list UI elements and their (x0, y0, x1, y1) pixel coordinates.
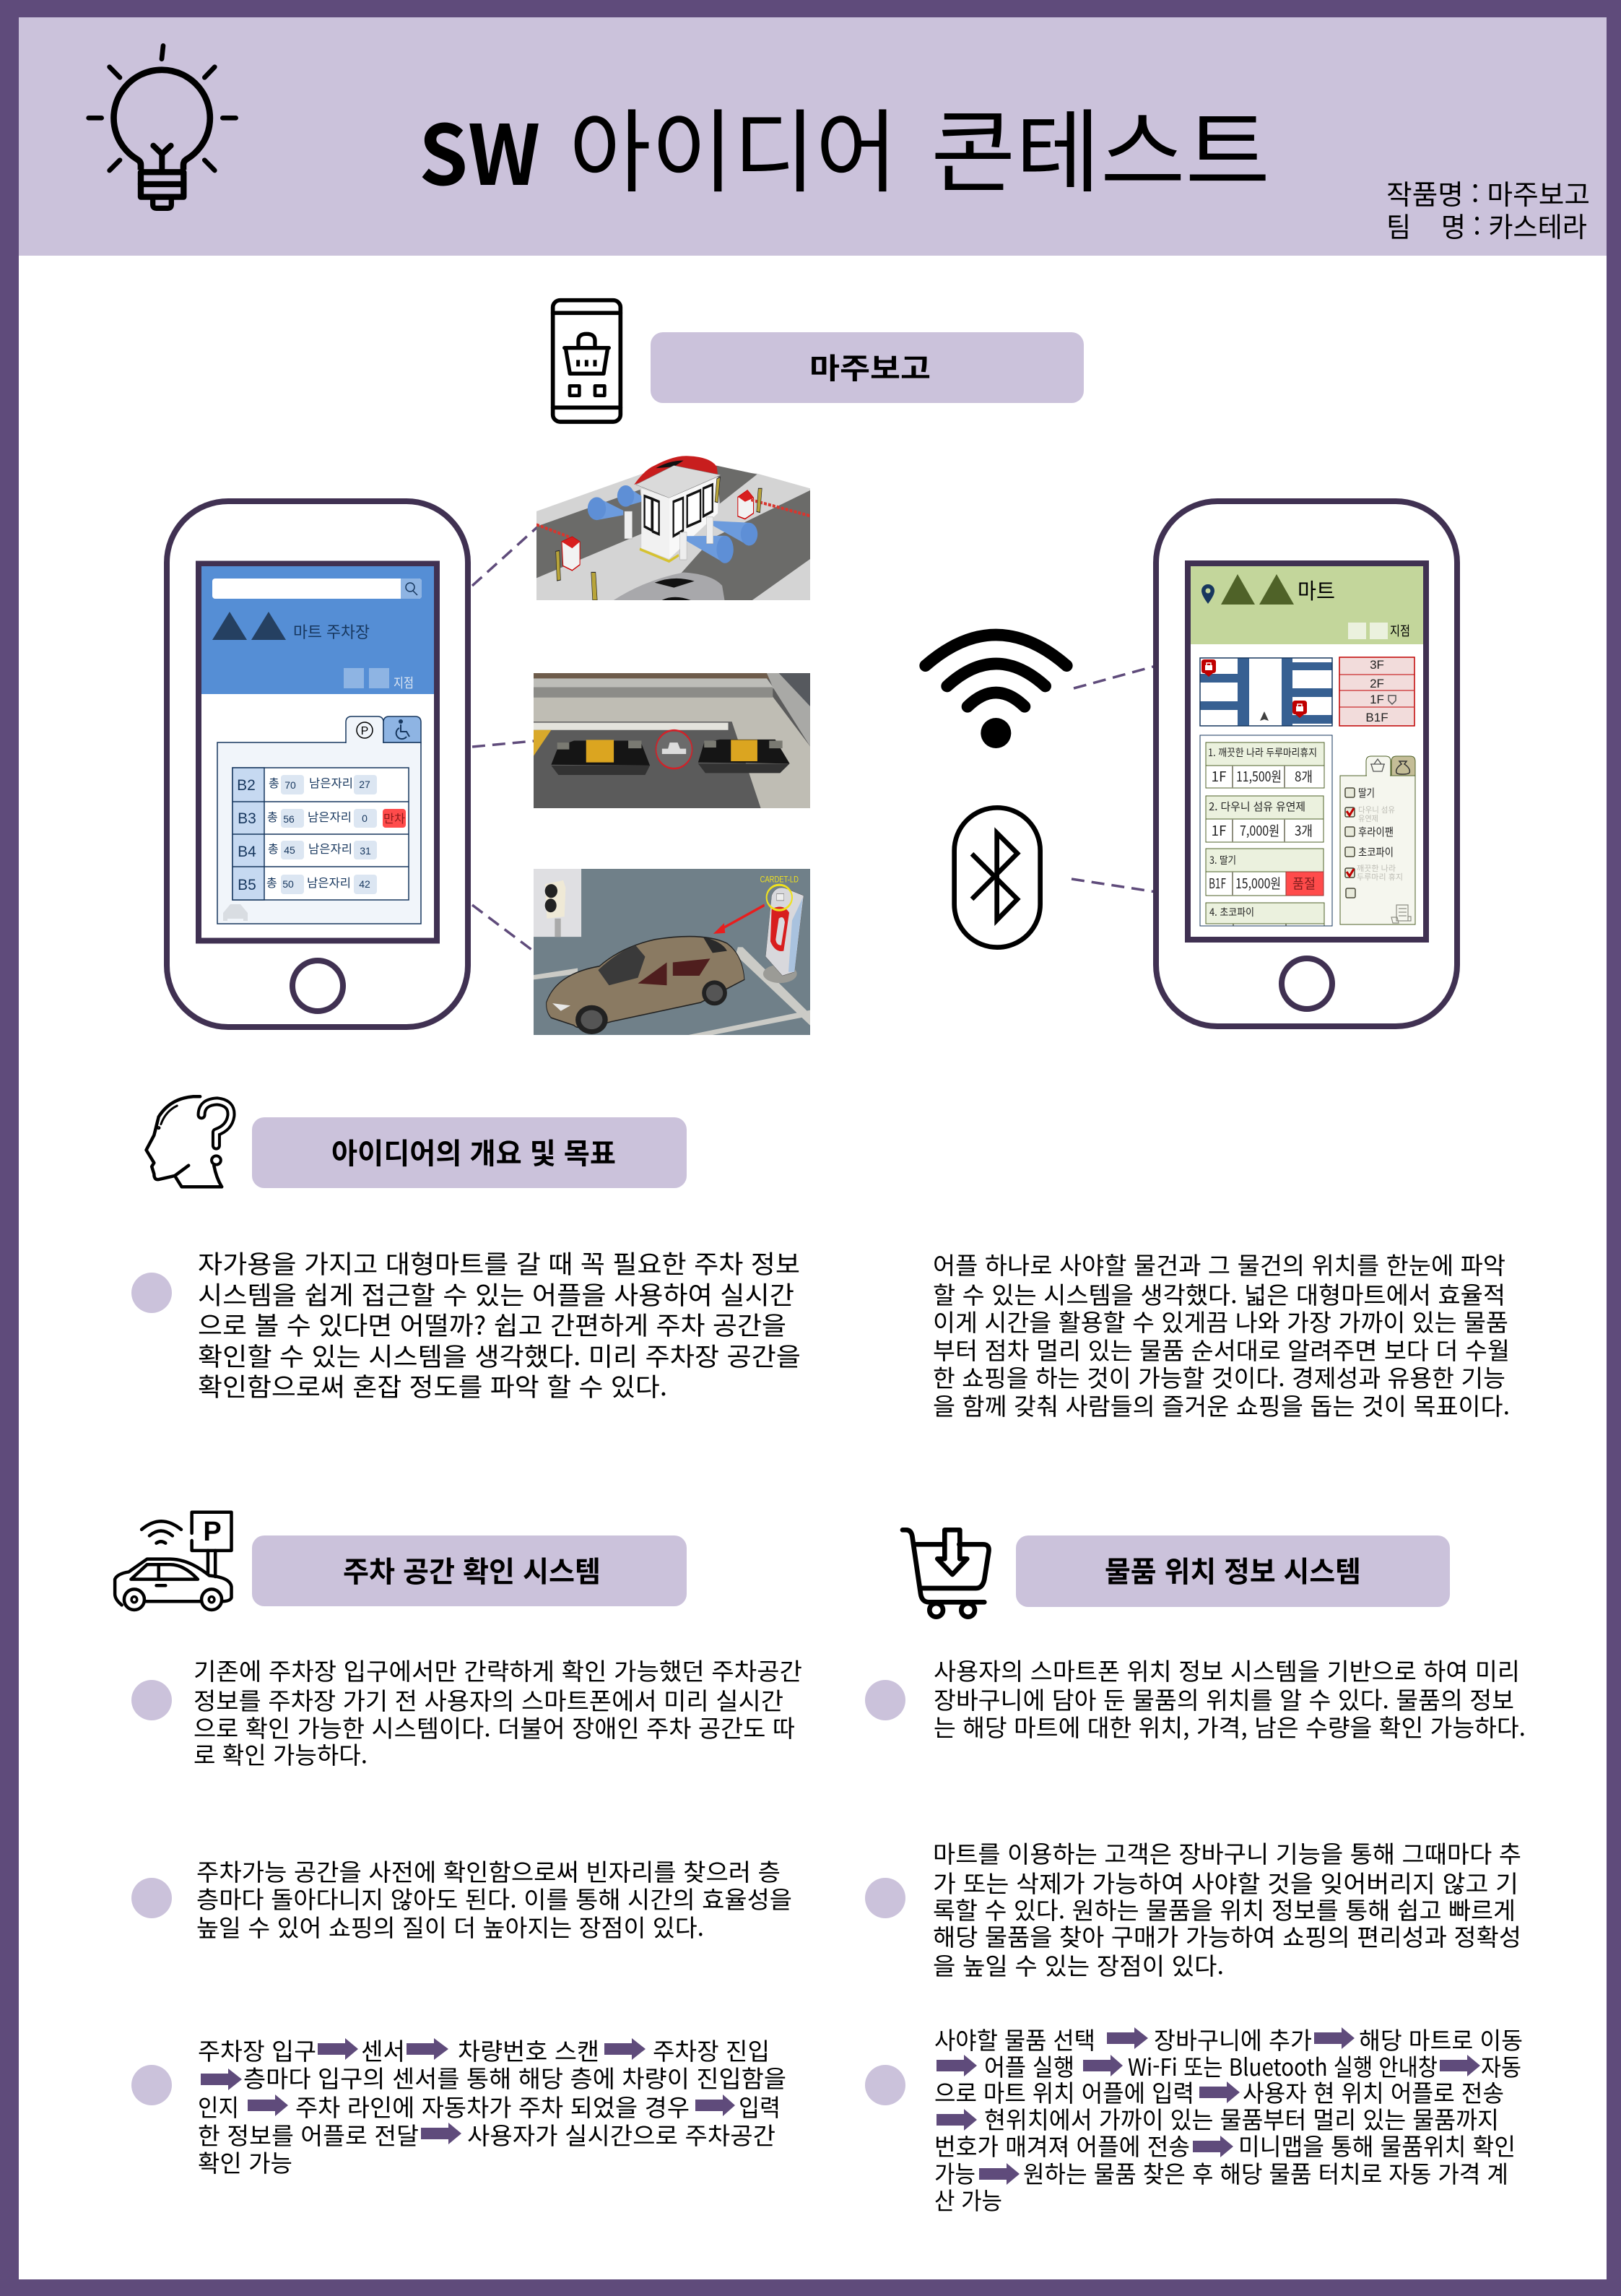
bullet (865, 1878, 905, 1918)
right phone: shopping app (1156, 501, 1457, 1026)
connector lines: icons to right phone (1072, 666, 1156, 892)
bullet (131, 1878, 172, 1918)
heading: 물품 위치 정보 시스템: 물품 위치 정보 시스템 (1105, 1548, 1361, 1590)
text: location system advantages (933, 1835, 1521, 1982)
arrow (1199, 2081, 1240, 2103)
parking table: 만차 (383, 809, 405, 826)
floor selector: 3F (1370, 658, 1384, 672)
product list: 4. 초코파이 (1209, 905, 1254, 919)
text: parking system flow: 주차 라인에 자동차가 주차 되었을 경우 (295, 2089, 690, 2123)
arrow (248, 2094, 288, 2116)
product list: 8개 (1295, 766, 1313, 786)
parking table: 27 (359, 779, 370, 790)
text: parking system advantages: 주차가능 공간을 사전에 확인함으로써 빈자리를 찾으러 층 (196, 1853, 781, 1888)
parking table: 남은자리 (308, 839, 352, 857)
arrow (1083, 2055, 1123, 2076)
text: parking system description: 정보를 주차장 가기 전 사용자의 스마트폰에서 미리 실시간 (194, 1682, 783, 1717)
shopping checklist: 후라이팬 (1358, 824, 1394, 839)
parking table (232, 768, 409, 900)
text: location system flow: 어플 실행 (984, 2048, 1074, 2083)
floor selector: 1F (1370, 693, 1384, 706)
icon: phone with basket (553, 300, 620, 422)
bullet (131, 1273, 172, 1313)
header band (19, 17, 1607, 256)
text: location system flow: 산 가능 (934, 2182, 1002, 2217)
bullet (865, 1680, 905, 1720)
parking table: 0 (362, 813, 368, 824)
app header: 지점 (394, 673, 414, 692)
icon: head with question mark (147, 1096, 231, 1187)
product list: 1F (1211, 820, 1227, 840)
work and team names (1386, 173, 1590, 245)
app header (201, 566, 434, 694)
heading: 마주보고: 마주보고 (809, 345, 931, 387)
parking panel (217, 716, 421, 924)
image: car detector: CARDET-LD (760, 875, 799, 885)
parking table: 남은자리 (308, 807, 352, 825)
text: location system flow: 가능 (934, 2155, 975, 2190)
text: parking system flow: 한 정보를 어플로 전달 (198, 2117, 419, 2152)
product list: 15,000원 (1235, 873, 1281, 893)
app header: 마트 (1298, 573, 1335, 605)
product list: 1. 깨끗한 나라 두루마리휴지 (1208, 745, 1317, 760)
product list: 2. 다우니 섬유 유연제 (1209, 799, 1305, 814)
shopping checklist: 두루마리 휴지 (1357, 871, 1403, 883)
image: wheel stopper sensor (534, 673, 810, 808)
text: parking system flow: 인지 (198, 2089, 239, 2123)
mini map (1200, 658, 1332, 726)
heading: 마주보고 (651, 332, 1084, 403)
bullet (865, 2065, 905, 2105)
text: location system advantages: 가 또는 삭제가 가능하여 사야할 것을 잊어버리지 않고 기 (933, 1865, 1518, 1899)
text: location system advantages: 록할 수 있다. 원하는 물품을 위치 정보를 통해 쉽고 빠르게 (933, 1892, 1516, 1926)
floor selector: B1F (1365, 711, 1389, 724)
image: parking gate sensors (536, 456, 810, 600)
parking table: 31 (360, 845, 371, 857)
work and team names: 작품명 : 마주보고 (1386, 173, 1590, 212)
title: SW (419, 90, 540, 209)
shopping checklist: 딸기 (1358, 785, 1375, 800)
arrow (936, 2055, 977, 2076)
text: location system flow: 사야할 물품 선택 (934, 2022, 1095, 2056)
parking table: B3 (238, 810, 256, 827)
text: idea overview right: 어플 하나로 사야할 물건과 그 물건의 위치를 한눈에 파악 (933, 1247, 1505, 1281)
product list: 1F (1211, 766, 1227, 786)
parking table: B4 (238, 844, 256, 860)
parking table: 총 (267, 807, 278, 825)
floor selector (1339, 657, 1414, 726)
text: parking system flow: 주차장 입구 (198, 2032, 316, 2067)
parking table: 42 (359, 878, 370, 890)
title: 아이디어 (569, 79, 898, 210)
shopping checklist: 유연제 (1358, 813, 1378, 824)
app header: 마트 주차장 (293, 620, 370, 643)
text: idea overview left (198, 1244, 801, 1404)
text: idea overview left: 자가용을 가지고 대형마트를 갈 때 꼭 필요한 주차 정보 (198, 1244, 800, 1281)
text: location system flow: 번호가 매겨져 어플에 전송 (934, 2128, 1190, 2162)
title: 콘테스트 (931, 79, 1270, 210)
text: parking system flow: 차량번호 스캔 (458, 2032, 599, 2067)
text: parking system flow (198, 2032, 786, 2179)
parking table: 총 (268, 839, 279, 857)
arrow (695, 2094, 735, 2116)
text: location system flow: 해당 마트로 이동 (1359, 2022, 1523, 2056)
parking table: 56 (283, 813, 295, 825)
arrow (1440, 2055, 1480, 2076)
work and team names: 팀 명 : 카스테라 (1386, 205, 1587, 245)
text: idea overview left: 시스템을 쉽게 접근할 수 있는 어플을 사용하여 실시간 (198, 1275, 794, 1312)
text: location system flow: 원하는 물품 찾은 후 해당 물품 터치로 자동 가격 계 (1023, 2155, 1508, 2190)
arrow (604, 2038, 646, 2060)
arrow (1107, 2027, 1148, 2049)
home button (292, 961, 343, 1011)
product list: 11,500원 (1236, 766, 1282, 786)
text: parking system advantages: 높일 수 있어 쇼핑의 질이 더 높아지는 장점이 있다. (196, 1909, 704, 1944)
text: idea overview right: 부터 점차 멀리 있는 물품 순서대로 알려주면 보다 더 수월 (933, 1332, 1510, 1366)
text: location system advantages: 해당 물품을 찾아 구매가 가능하여 쇼핑의 편리성과 정확성 (933, 1918, 1521, 1953)
arrow (318, 2038, 358, 2060)
icon: lightbulb (89, 46, 236, 208)
arrow (936, 2109, 977, 2131)
parking table: 총 (269, 774, 279, 791)
text: idea overview left: 으로 볼 수 있다면 어떨까? 쉽고 간편하게 주차 공간을 (198, 1306, 786, 1343)
text: location system advantages: 을 높일 수 있는 장점이 있다. (933, 1947, 1224, 1982)
arrow (407, 2038, 448, 2060)
text: parking system flow: 입력 (739, 2089, 781, 2123)
parking table: 남은자리 (307, 873, 351, 891)
title (419, 79, 1270, 210)
text: parking system advantages: 층마다 돌아다니지 않아도 된다. 이를 통해 시간의 효율성을 (196, 1881, 792, 1915)
text: location system description: 사용자의 스마트폰 위치 정보 시스템을 기반으로 하여 미리 (934, 1652, 1520, 1687)
shopping checklist (1340, 756, 1415, 924)
text: parking system description: 으로 확인 가능한 시스템이다. 더불어 장애인 주차 공간도 따 (194, 1710, 795, 1744)
image: car detector (534, 869, 810, 1035)
arrow (1193, 2136, 1233, 2157)
arrow (201, 2068, 242, 2090)
text: location system flow: 장바구니에 추가 (1154, 2022, 1312, 2056)
left phone: parking app (167, 501, 468, 1027)
parking table: 50 (282, 878, 294, 890)
text: location system flow: 미니맵을 통해 물품위치 확인 (1238, 2128, 1516, 2162)
arrow (979, 2163, 1020, 2185)
parking panel: P (361, 725, 368, 737)
text: idea overview right: 할 수 있는 시스템을 생각했다. 넓은 대형마트에서 효율적 (933, 1276, 1505, 1311)
text: location system description (934, 1652, 1526, 1743)
text: location system description: 는 해당 마트에 대한 위치, 가격, 남은 수량을 확인 가능하다. (934, 1709, 1526, 1743)
arrow (421, 2123, 461, 2144)
parking table: B2 (237, 777, 256, 794)
arrow (1314, 2027, 1355, 2049)
app header: 지점 (1390, 621, 1410, 640)
text: parking system flow: 주차장 진입 (653, 2032, 770, 2067)
heading: 물품 위치 정보 시스템 (1016, 1535, 1450, 1607)
icon: wifi (926, 635, 1066, 748)
text: parking system flow: 센서 (361, 2032, 405, 2067)
text: location system description: 장바구니에 담아 둔 물품의 위치를 알 수 있다. 물품의 정보 (934, 1681, 1514, 1716)
icon: bluetooth (955, 807, 1040, 948)
text: idea overview right: 이게 시간을 활용할 수 있게끔 나와 가장 가까이 있는 물품 (933, 1304, 1508, 1338)
parking table: 남은자리 (309, 774, 353, 791)
text: location system flow: 으로 마트 위치 어플에 입력 (934, 2074, 1194, 2109)
shopping checklist: 깨끗한 나라 (1357, 862, 1396, 874)
bullet (131, 1680, 172, 1720)
text: parking system flow: 사용자가 실시간으로 주차공간 (467, 2117, 775, 2152)
heading: 주차 공간 확인 시스템: 주차 공간 확인 시스템 (343, 1548, 601, 1590)
parking table: 70 (284, 779, 296, 791)
text: parking system description (194, 1652, 802, 1771)
parking table: 45 (284, 844, 295, 856)
text: idea overview left: 확인함으로써 혼잡 정도를 파악 할 수 있다. (198, 1367, 667, 1404)
icon: car with parking sign and wifi (115, 1512, 231, 1610)
text: location system flow: 사용자 현 위치 어플로 전송 (1243, 2074, 1504, 2109)
text: parking system description: 로 확인 가능하다. (194, 1736, 368, 1771)
text: parking system flow: 확인 가능 (198, 2144, 292, 2179)
heading: 아이디어의 개요 및 목표 (252, 1117, 687, 1188)
floor selector: 2F (1370, 677, 1384, 690)
text: location system flow: Wi-Fi 또는 Bluetooth 실행 안내창 (1128, 2048, 1438, 2083)
text: idea overview right: 을 함께 갖춰 사람들의 즐거운 쇼핑을 돕는 것이 목표이다. (933, 1387, 1510, 1422)
text: location system flow: 자동 (1481, 2048, 1521, 2083)
text: parking system description: 기존에 주차장 입구에서만 간략하게 확인 가능했던 주차공간 (194, 1652, 802, 1687)
bullet (131, 2065, 172, 2105)
heading: 주차 공간 확인 시스템 (252, 1535, 687, 1606)
text: location system flow: 현위치에서 가까이 있는 물품부터 멀리 있는 물품까지 (984, 2101, 1499, 2136)
product list: 3. 딸기 (1209, 853, 1236, 867)
heading: 아이디어의 개요 및 목표: 아이디어의 개요 및 목표 (331, 1130, 616, 1172)
text: idea overview left: 확인할 수 있는 시스템을 생각했다. 미리 주차장 공간을 (198, 1337, 801, 1374)
parking table: 총 (266, 873, 277, 891)
shopping checklist: 다우니 섬유 (1358, 804, 1395, 815)
app header (1191, 566, 1423, 644)
product list: 품절 (1292, 873, 1316, 893)
text: parking system flow: 층마다 입구의 센서를 통해 해당 층에 차량이 진입함을 (243, 2060, 786, 2094)
product list (1200, 735, 1332, 926)
icon text: parking P: P (203, 1517, 222, 1547)
product list: 3개 (1295, 820, 1313, 840)
shopping checklist: 초코파이 (1358, 844, 1394, 859)
icon: shopping cart with arrow (903, 1530, 988, 1617)
connector lines: left phone to images (472, 527, 538, 951)
home button (1282, 958, 1332, 1009)
text: parking system advantages (196, 1853, 792, 1944)
text: idea overview right: 한 쇼핑을 하는 것이 가능할 것이다. 경제성과 유용한 기능 (933, 1359, 1505, 1394)
product list: 7,000원 (1240, 820, 1279, 840)
parking table: B5 (238, 877, 256, 893)
product list: B1F (1209, 873, 1226, 893)
text: idea overview right (933, 1247, 1510, 1422)
text: location system advantages: 마트를 이용하는 고객은 장바구니 기능을 통해 그때마다 추 (933, 1835, 1521, 1870)
icon: car (223, 904, 248, 921)
text: location system flow (934, 2022, 1523, 2217)
